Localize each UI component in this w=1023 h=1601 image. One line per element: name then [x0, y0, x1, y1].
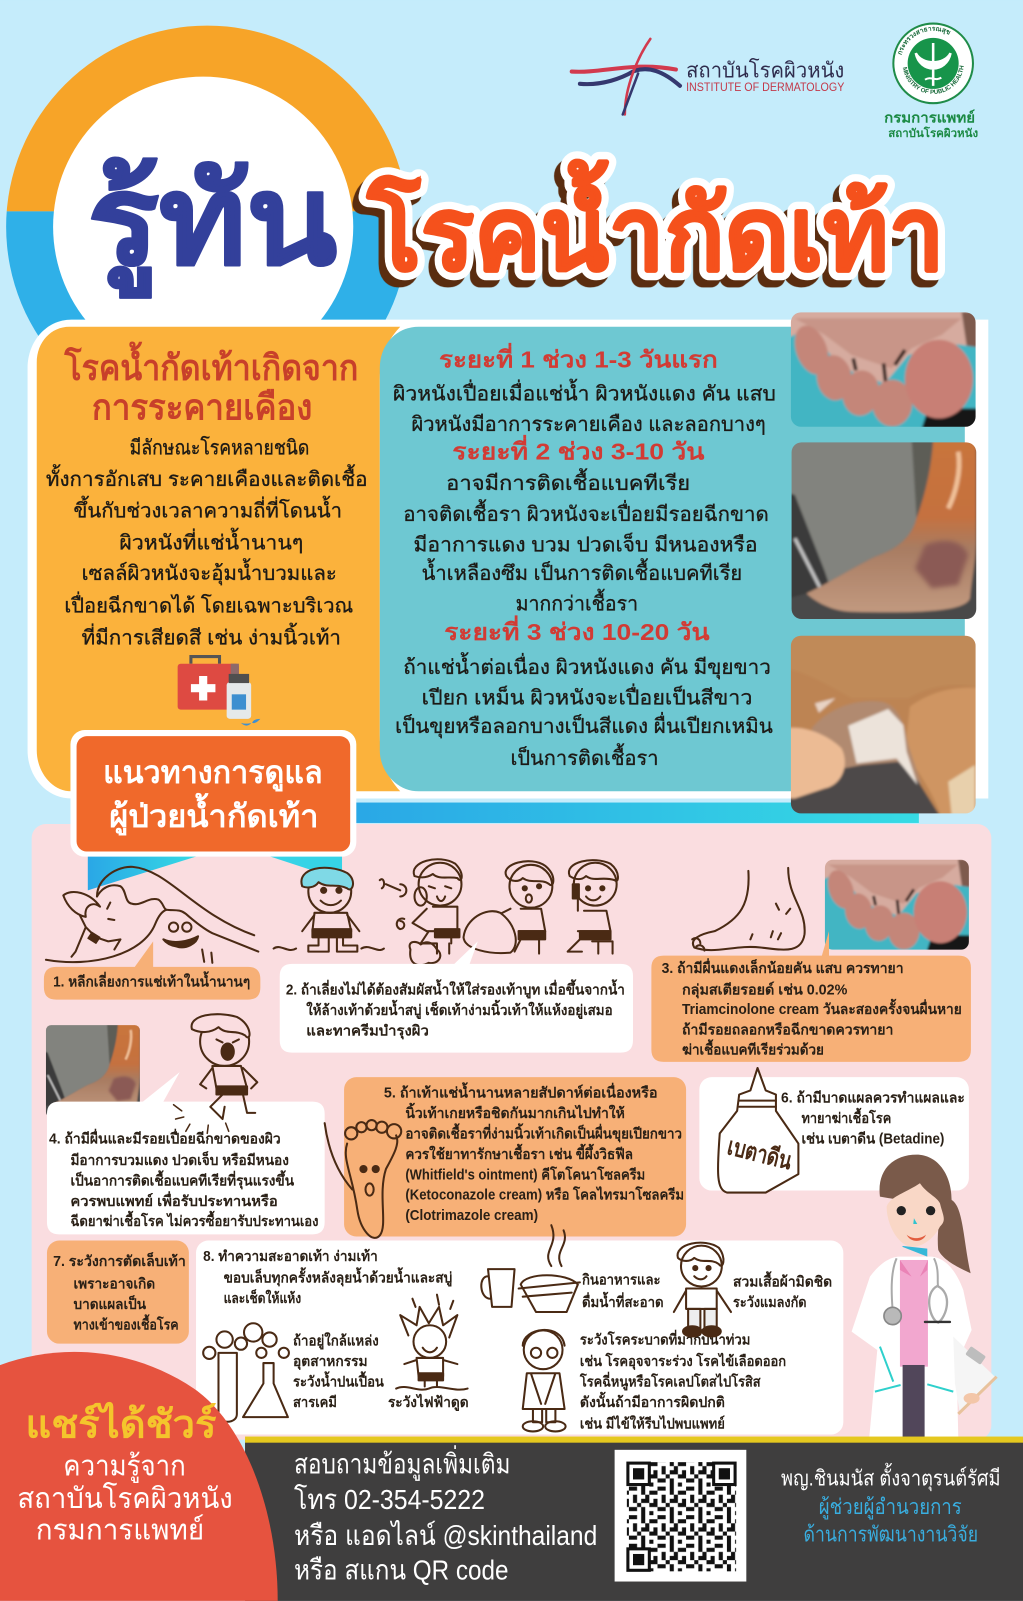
illustration: betadine bottle: เบตาดีน — [725, 1132, 795, 1175]
bubble 5: antifungal: (Ketoconazole cream) หรือ โคลไทรมาโซลครีม — [405, 1186, 684, 1204]
illustration: boys washing feet — [274, 859, 618, 965]
bubble 7: toenails — [47, 1241, 189, 1344]
bubble 7: toenails: ทางเข้าของเชื้อโรค — [74, 1313, 179, 1333]
bubble 4: see a doctor: 4. ถ้ามีผื่นและมีรอยเปื่อยฉีกขาดของผิว — [49, 1128, 281, 1148]
bubble 8: hygiene: ระวังไฟฟ้าดูด — [388, 1393, 469, 1411]
bubble 2: wear boots: ให้ล้างเท้าด้วยน้ำสบู่ เช็ดเท้าง่ามนิ้วเท้าให้แห้งอยู่เสมอ — [306, 999, 613, 1019]
red share circle — [0, 1352, 278, 1601]
title: รู้ทัน: รู้ทัน — [88, 151, 337, 297]
photo: feet stage 1 — [785, 305, 985, 438]
bubble 7: toenails: เพราะอาจเกิด — [74, 1276, 155, 1293]
bubble 2: wear boots — [280, 941, 633, 1053]
bubble 4: see a doctor: เป็นอาการติดเชื้อแบคทีเรียที่รุนแรงขึ้น — [70, 1169, 294, 1189]
stage 1 heading: ระยะที่ 1 ช่วง 1-3 วันแรก — [439, 343, 718, 373]
causes text: มีลักษณะโรคหลายชนิด — [130, 435, 309, 459]
title ring: orange and blue circle — [6, 26, 400, 336]
illustration: foot with rash — [692, 868, 805, 951]
causes text: ผิวหนังที่แช่น้ำนานๆ — [119, 527, 303, 554]
illustration: chemistry flasks — [203, 1323, 289, 1422]
bubble 1: avoid soaking: 1. หลีกเลี่ยงการแช่เท้าในน้ำนานๆ — [53, 970, 250, 990]
bubble 3: steroid cream — [651, 931, 971, 1062]
bubble 5: antifungal: นิ้วเท้าเกยหรือชิดกันมากเกินไปทำให้ — [405, 1102, 625, 1122]
title: โรคน้ำกัดเท้า: โรคน้ำกัดเท้า — [367, 160, 944, 292]
bubble 8: hygiene: เช่น มีไข้ให้รีบไปพบแพทย์ — [580, 1414, 725, 1432]
photo: toes stage 3 — [785, 632, 985, 818]
stage 1 text — [393, 378, 776, 436]
heading: causes — [63, 341, 358, 428]
stage 3 text — [395, 652, 773, 770]
bubble 5: antifungal: (Clotrimazole cream) — [405, 1208, 538, 1224]
photo: foot small — [43, 1023, 144, 1120]
causes text: ขึ้นกับช่วงเวลาความถี่ที่โดนน้ำ — [74, 496, 342, 523]
heading: causes: โรคน้ำกัดเท้าเกิดจาก — [63, 341, 358, 388]
stage 2 text — [403, 468, 769, 616]
bubble 7: toenails: 7. ระวังการตัดเล็บเท้า — [53, 1251, 186, 1270]
bubble 8: hygiene: กินอาหารและ — [582, 1271, 661, 1288]
doctor illustration — [852, 1155, 997, 1438]
illustration: crying boy — [174, 1014, 257, 1133]
bubble 6: wound care: 6. ถ้ามีบาดแผลควรทำแผลและ — [781, 1090, 965, 1107]
bubble 8: hygiene: สารเคมี — [293, 1395, 337, 1411]
author text: ผู้ช่วยผู้อำนวยการ — [819, 1495, 962, 1520]
bubble 2: wear boots: และทาครีมบำรุงผิว — [306, 1022, 429, 1039]
photo: toes small — [820, 854, 976, 959]
bubble 3: steroid cream: 3. ถ้ามีผื่นแดงเล็กน้อยคัน แสบ ควรทายา — [662, 957, 904, 977]
stage 3 text: เป็นขุยหรือลอกบางเป็นสีแดง ผื่นเปียกเหมิน — [395, 712, 773, 739]
bubble 8: hygiene: 8. ทำความสะอาดเท้า ง่ามเท้า — [203, 1248, 378, 1265]
title: โรคน้ำกัดเท้า: โรคน้ำกัดเท้า — [367, 160, 944, 292]
illustration: electric shock boy — [396, 1295, 468, 1390]
QR code — [615, 1450, 746, 1582]
author text — [781, 1463, 1001, 1547]
bubble 8: hygiene: ระวังโรคระบาดที่มากับน้ำท่วม — [580, 1329, 750, 1349]
causes text: เซลล์ผิวหนังจะอุ้มน้ำบวมและ — [82, 558, 337, 586]
causes text: เปื่อยฉีกขาดได้ โดยเฉพาะบริเวณ — [64, 592, 353, 618]
bubble 8: hygiene: ระวังแมลงกัด — [733, 1295, 807, 1311]
panel: stages — [380, 327, 965, 791]
stage 1 text: ผิวหนังเปื่อยเมื่อแช่น้ำ ผิวหนังแดง คัน แสบ — [393, 378, 776, 405]
stage 3 text: ถ้าแช่น้ำต่อเนื่อง ผิวหนังแดง คัน มีขุยขาว — [403, 652, 771, 680]
author text: ด้านการพัฒนางานวิจัย — [803, 1523, 978, 1547]
bubble 2: wear boots: 2. ถ้าเลี่ยงไม่ได้ต้องสัมผัสน้ำให้ใส่รองเท้าบูท เมื่อขึ้นจากน้ำ — [286, 978, 625, 998]
stage 1 text: ผิวหนังมีอาการระคายเคือง และลอกบางๆ — [411, 413, 766, 436]
logo: ministry of public health — [884, 22, 978, 140]
button: care guide heading: แนวทางการดูแล — [103, 754, 323, 792]
cyan strip under panels — [352, 803, 919, 823]
panel: causes — [37, 327, 400, 791]
bubble 3: steroid cream: ฆ่าเชื้อแบคทีเรียร่วมด้วย — [682, 1039, 824, 1059]
illustration: glass and bowl with steam — [481, 1225, 580, 1312]
bubble 8: hygiene: อุตสาหกรรม — [293, 1354, 368, 1370]
contact text — [294, 1445, 597, 1585]
stage 3 text: เป็นการติดเชื้อรา — [510, 743, 659, 770]
icon: medical kit — [178, 657, 260, 726]
boy soap — [380, 859, 462, 965]
button: care guide heading — [70, 730, 356, 857]
bubble 4: see a doctor: มีอาการบวมแดง ปวดเจ็บ หรือมีหนอง — [70, 1150, 289, 1169]
bubble 5: antifungal: 5. ถ้าเท้าแช่น้ำนานหลายสัปดาห์ต่อเนื่องหรือ — [384, 1082, 657, 1102]
bubble 4: see a doctor: ฉีดยาฆ่าเชื้อโรค ไม่ควรซื้อยารับประทานเอง — [70, 1210, 319, 1230]
stage 2 text: มีอาการแดง บวม ปวดเจ็บ มีหนองหรือ — [413, 531, 758, 556]
illustration: foot with face — [325, 1120, 401, 1238]
department name: กรมการแพทย์ — [884, 110, 975, 127]
bubble 6: wound care — [699, 1077, 969, 1191]
causes text — [46, 435, 368, 649]
bubble 4: see a doctor — [47, 1072, 325, 1234]
contact text: หรือ แอดไลน์ @skinthailand — [294, 1520, 597, 1551]
institute english: INSTITUTE OF DERMATOLOGY — [686, 81, 844, 94]
stage 2 text: น้ำเหลืองซึม เป็นการติดเชื้อแบคทีเรีย — [422, 558, 742, 585]
institute name: สถาบันโรคผิวหนัง — [686, 58, 844, 83]
heading: causes: การระคายเคือง — [92, 388, 312, 428]
bubble 8: hygiene — [196, 1241, 843, 1435]
illustration: doctor man — [523, 1330, 566, 1431]
bubble 8: hygiene: ดื่มน้ำที่สะอาด — [582, 1291, 664, 1311]
bubble 6: wound care: ทายาฆ่าเชื้อโรค — [801, 1107, 891, 1127]
boy lotion — [568, 860, 618, 954]
knowledge source text: สถาบันโรคผิวหนัง — [17, 1482, 233, 1515]
bubble 7: toenails: บาดแผลเป็น — [74, 1294, 146, 1313]
bubble 4: see a doctor: ควรพบแพทย์ เพื่อรับประทานหรือ — [70, 1190, 278, 1210]
stage 2 text: อาจติดเชื้อรา ผิวหนังจะเปื่อยมีรอยฉีกขาด — [403, 499, 769, 526]
bubble 5: antifungal: อาจติดเชื้อราที่ง่ามนิ้วเท้าเกิดเป็นผื่นขุยเปียกขาว — [405, 1122, 682, 1142]
bubble 5: antifungal: (Whitfield's ointment) คีโตโคนาโซลครีม — [405, 1165, 645, 1183]
bubble 1: avoid soaking — [44, 941, 260, 1000]
knowledge source text — [17, 1450, 233, 1547]
cyan wedges under button — [88, 856, 342, 890]
bubble 8: hygiene: สวมเสื้อผ้ามิดชิด — [733, 1270, 832, 1290]
stage 3 text: เปียก เหม็น ผิวหนังจะเปื่อยเป็นสีขาว — [422, 684, 752, 710]
logo mark — [572, 39, 680, 114]
bubble 8: hygiene: เช่น โรคอุจจาระร่วง โรคไข้เลือดออก — [580, 1352, 786, 1370]
bubble 8: hygiene: ดังนั้นถ้ามีอาการผิดปกติ — [580, 1391, 725, 1411]
share heading: แชร์ได้ชัวร์ — [26, 1402, 217, 1447]
stage 2 heading: ระยะที่ 2 ช่วง 3-10 วัน — [452, 434, 704, 464]
footer bar — [245, 1437, 1023, 1601]
photo: foot stage 2 — [785, 438, 985, 625]
bubble 8: hygiene: โรคฉี่หนูหรือโรคเลปโตสไปโรสิส — [579, 1371, 761, 1391]
button: care guide heading: ผู้ป่วยน้ำกัดเท้า — [109, 793, 319, 836]
illustration: wave and running boy — [46, 867, 258, 963]
bubble 3: steroid cream: Triamcinolone cream วันละสองครั้งจนผื่นหาย — [682, 998, 962, 1018]
boy standing — [274, 868, 384, 952]
bubble 3: steroid cream: กลุ่มสเตียรอยด์ เช่น 0.02% — [682, 981, 848, 998]
contact text: สอบถามข้อมูลเพิ่มเติม — [294, 1445, 510, 1481]
contact text: หรือ สแกน QR code — [294, 1554, 508, 1585]
illustration: boy in long clothes — [674, 1243, 731, 1337]
stage 2 text: อาจมีการติดเชื้อแบคทีเรีย — [446, 468, 690, 495]
bubble 8: hygiene: ถ้าอยู่ใกล้แหล่ง — [293, 1332, 379, 1350]
stage 2 text: มากกว่าเชื้อรา — [516, 589, 638, 616]
causes text: ที่มีการเสียดสี เช่น ง่ามนิ้วเท้า — [82, 622, 341, 649]
bubble 3: steroid cream: ถ้ามีรอยถลอกหรือฉีกขาดควรทายา — [682, 1021, 893, 1038]
causes text: ทั้งการอักเสบ ระคายเคืองและติดเชื้อ — [46, 464, 368, 491]
bubble 6: wound care: เช่น เบตาดีน (Betadine) — [801, 1132, 945, 1148]
logo: institute of dermatology — [572, 39, 844, 114]
logo: ministry of public health: กระทรวงสาธารณสุข — [898, 26, 950, 55]
bubble 8: hygiene: ระวังน้ำปนเปื้อน — [293, 1371, 384, 1391]
knowledge source text: ความรู้จาก — [63, 1450, 186, 1483]
institute name small: สถาบันโรคผิวหนัง — [888, 126, 978, 140]
logo: ministry of public health: MINISTRY OF PUBLIC HEALTH — [902, 66, 964, 94]
bubble 8: hygiene: ขอบเล็บทุกครั้งหลังลุยน้ำด้วยน้ำและสบู่ — [224, 1266, 452, 1286]
illustration: betadine bottle — [718, 1068, 798, 1193]
boy with bag — [464, 861, 553, 954]
stage 3 heading: ระยะที่ 3 ช่วง 10-20 วัน — [444, 615, 710, 645]
bubble 5: antifungal — [344, 1077, 686, 1236]
bubble 8: hygiene: และเช็ดให้แห้ง — [224, 1288, 301, 1307]
panel: care guide background — [32, 824, 991, 1440]
knowledge source text: กรมการแพทย์ — [36, 1514, 204, 1547]
bubble 5: antifungal: ควรใช้ยาทารักษาเชื้อรา เช่น ขี้ผึ้งวิธฟีล — [405, 1143, 633, 1163]
contact text: โทร 02-354-5222 — [294, 1484, 485, 1515]
panel outline — [28, 320, 988, 798]
